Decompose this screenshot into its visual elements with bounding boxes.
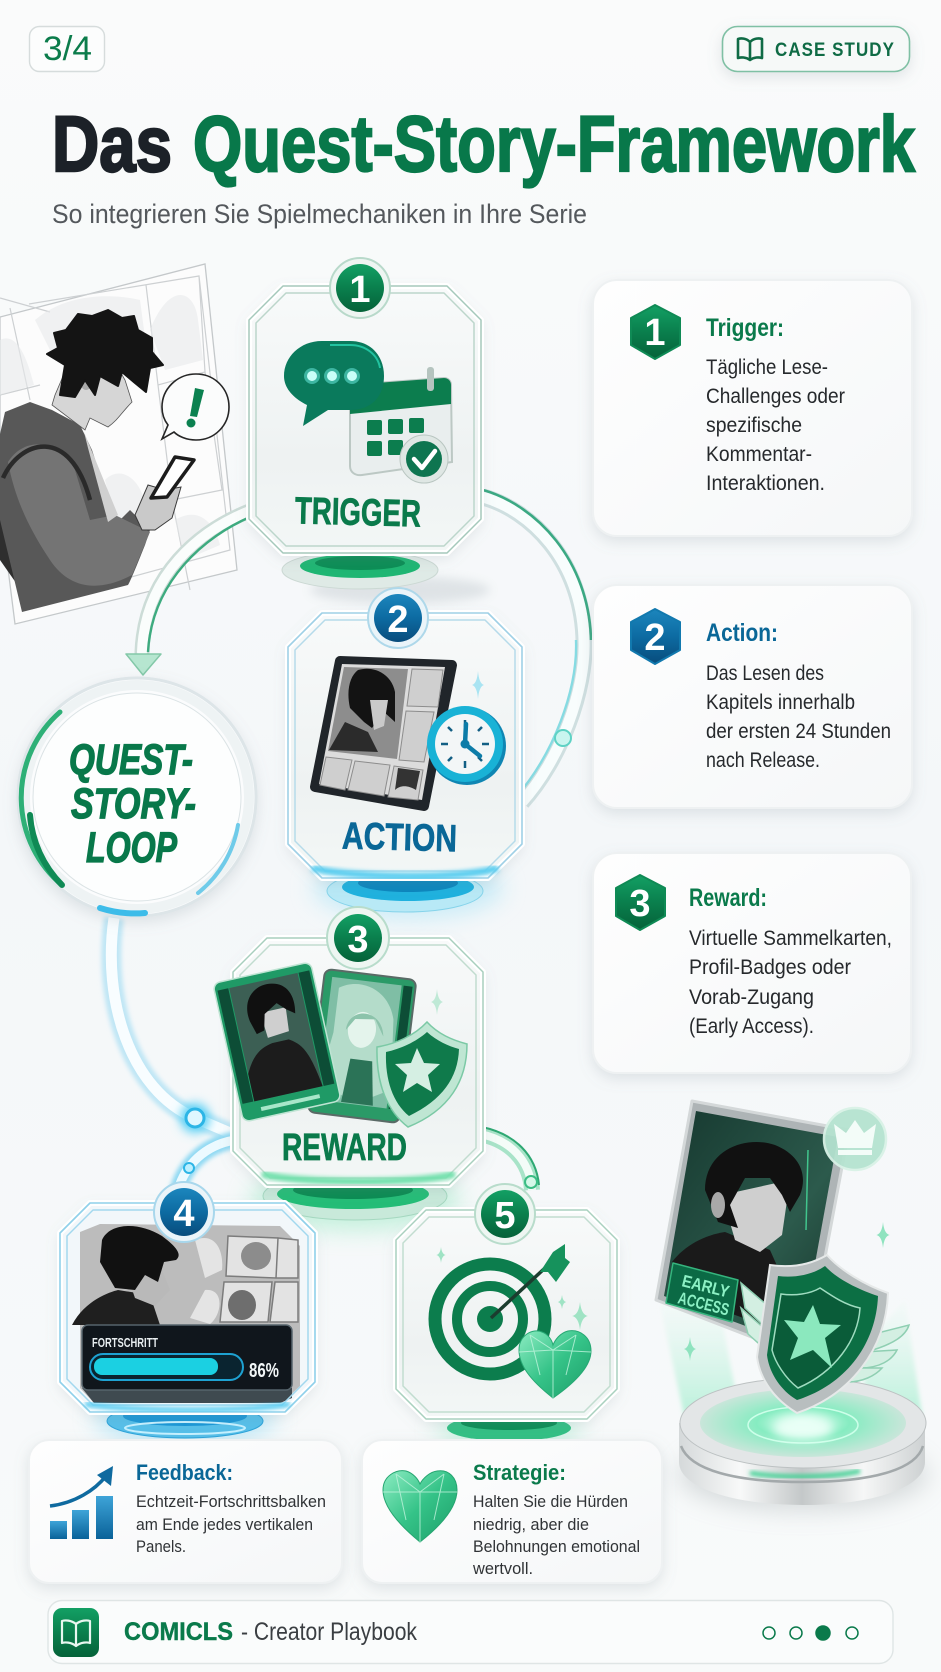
- footer bar: COMICLS: [124, 1618, 233, 1646]
- info card: action: [593, 585, 912, 808]
- info card: action: nach Release.: [706, 749, 820, 772]
- info card: trigger: Tägliche Lese-: [706, 356, 828, 379]
- base: trigger: [282, 551, 490, 604]
- info card: feedback: am Ende jedes vertikalen: [136, 1516, 313, 1534]
- page counter badge: 3/4: [43, 30, 92, 68]
- badge 3: [327, 907, 389, 969]
- pagination dots: [763, 1626, 858, 1640]
- sparkle: [472, 671, 484, 699]
- quest story loop circle: [18, 678, 256, 916]
- info card: strategy: niedrig, aber die: [473, 1516, 589, 1534]
- title: Das: [52, 99, 172, 188]
- exclamation mark: [186, 388, 204, 428]
- node: [180, 1103, 210, 1133]
- icon: emerald heart: [519, 1331, 591, 1398]
- info card: action: Das Lesen des: [706, 662, 824, 685]
- info card: reward: Reward:: [689, 884, 767, 912]
- collectible card: heroine: [308, 969, 416, 1123]
- hex badge 1: 1: [644, 312, 666, 354]
- light beam: [660, 1300, 922, 1415]
- manga scene: [72, 1224, 300, 1403]
- hex badge 2: 2: [644, 617, 666, 659]
- label: ACTION: [341, 815, 458, 860]
- connector: trigger to action: [483, 490, 591, 802]
- footer bar: [48, 1600, 893, 1664]
- pedestal: [678, 1378, 928, 1511]
- info card: trigger: Trigger:: [706, 314, 784, 342]
- info card: reward: [593, 853, 911, 1073]
- icon: target: [435, 1264, 545, 1374]
- info card: reward: Vorab-Zugang: [689, 986, 814, 1009]
- loop label: STORY-: [71, 780, 196, 828]
- case study pill: [722, 26, 910, 72]
- sparkle: [431, 989, 443, 1015]
- hex badge 3: [616, 875, 665, 930]
- hex badge 1: [631, 305, 680, 359]
- crown medallion: [824, 1108, 886, 1170]
- info card: feedback: Feedback:: [136, 1460, 233, 1485]
- hand: [135, 485, 181, 530]
- badge 4: [154, 1182, 214, 1242]
- info card: trigger: spezifische: [706, 414, 802, 437]
- badge 1: [330, 258, 390, 318]
- info card: strategy: Belohnungen emotional: [473, 1538, 640, 1556]
- sparkles: [684, 1222, 890, 1361]
- phone: [151, 457, 194, 498]
- icon: calendar: [350, 367, 452, 475]
- base: reward: [250, 1170, 460, 1230]
- info card: action: der ersten 24 Stunden: [706, 720, 891, 743]
- connector: reward to feedback: [178, 1140, 235, 1190]
- sleeve: [8, 444, 150, 586]
- hex badge 2: [631, 609, 680, 664]
- manga page: [0, 264, 237, 624]
- label: REWARD: [282, 1127, 407, 1169]
- connector: reward to strategy: [480, 1127, 539, 1190]
- blue ring segments: [198, 825, 238, 893]
- info card: action: Kapitels innerhalb: [706, 691, 855, 714]
- hair: [47, 310, 163, 397]
- node: [555, 730, 571, 746]
- shield emblem: [757, 1255, 888, 1413]
- icon: check circle: [400, 435, 448, 483]
- badge 3: 3: [347, 919, 369, 961]
- loop label: [69, 736, 196, 872]
- icon: emerald heart: [383, 1471, 457, 1542]
- badge 2: [368, 588, 428, 648]
- shirt: [84, 432, 118, 522]
- sparkles: [436, 1247, 588, 1330]
- base: feedback: [95, 1394, 275, 1442]
- subtitle: So integrieren Sie Spielmechaniken in Ihre Serie: [52, 199, 587, 229]
- early access tag: ACCESS: [676, 1288, 731, 1319]
- badge 5: 5: [494, 1195, 516, 1237]
- info card: reward: Profil-Badges oder: [689, 956, 851, 979]
- panel: trigger: [249, 286, 481, 553]
- badge 5: [475, 1184, 535, 1244]
- icon: shield: [377, 1022, 467, 1127]
- portrait: [672, 1232, 790, 1335]
- info card: trigger: Kommentar-: [706, 443, 812, 466]
- early access tag: [666, 1263, 738, 1322]
- badge 4: 4: [173, 1193, 195, 1235]
- panel: feedback: [60, 1203, 315, 1412]
- hex badge 3: 3: [629, 883, 651, 925]
- ear: [79, 366, 93, 390]
- progress widget: FORTSCHRITT: [92, 1336, 158, 1350]
- manga reader illustration: [0, 264, 237, 624]
- info card: feedback: [29, 1440, 342, 1583]
- badge 1: 1: [349, 269, 371, 311]
- progress widget: 86%: [249, 1360, 279, 1382]
- icon: clock: [427, 706, 506, 785]
- base: action: [313, 858, 503, 918]
- backpack: [0, 470, 28, 600]
- strap: [3, 447, 90, 500]
- info card: trigger: [593, 280, 912, 536]
- base: strategy: [437, 1410, 581, 1450]
- info card: feedback: Panels.: [136, 1538, 186, 1556]
- icon: arrow: [491, 1244, 570, 1318]
- loop label: QUEST-: [69, 736, 193, 784]
- info card: strategy: wertvoll.: [472, 1560, 533, 1578]
- speech bubble: [162, 374, 229, 440]
- case study pill: CASE STUDY: [775, 40, 895, 61]
- connector: trigger to loop: [126, 510, 252, 675]
- right wing: [848, 1325, 909, 1382]
- label: TRIGGER: [294, 490, 421, 536]
- info card: strategy: Halten Sie die Hürden: [473, 1493, 628, 1511]
- left wing: [741, 1283, 768, 1350]
- panel: strategy: [396, 1210, 617, 1419]
- info card: trigger: Interaktionen.: [706, 472, 825, 495]
- badge 2: 2: [387, 599, 409, 641]
- info card: strategy: [362, 1440, 662, 1583]
- icon: logo: [53, 1608, 99, 1657]
- page counter badge: [30, 26, 104, 72]
- info card: reward: (Early Access).: [689, 1015, 814, 1038]
- panel: action: [288, 613, 522, 878]
- footer bar: - Creator Playbook: [241, 1618, 417, 1646]
- access card: [656, 1101, 849, 1358]
- early access tag: EARLY: [680, 1271, 732, 1302]
- progress widget: [82, 1325, 292, 1390]
- icon: chat bubble: [284, 341, 384, 426]
- panel: reward: [213, 938, 483, 1185]
- stand glow and bases: [95, 551, 581, 1450]
- info card: reward: Virtuelle Sammelkarten,: [689, 927, 892, 950]
- icon: tablet: [315, 661, 452, 806]
- icon: growth chart: [50, 1466, 113, 1539]
- icon: open book: [738, 38, 762, 60]
- info card: trigger: Challenges oder: [706, 385, 845, 408]
- collectible card: hero: [213, 962, 341, 1122]
- loop label: LOOP: [86, 824, 177, 872]
- green ring segment: [21, 712, 62, 885]
- hoodie: [0, 402, 150, 612]
- info card: feedback: Echtzeit-Fortschrittsbalken: [136, 1493, 326, 1511]
- arrow head: [126, 654, 161, 675]
- info card: strategy: Strategie:: [473, 1460, 566, 1485]
- early access illustration: [656, 1101, 928, 1511]
- info card: action: Action:: [706, 619, 778, 647]
- face and neck: [52, 345, 132, 430]
- connector: loop to reward: [111, 918, 235, 1135]
